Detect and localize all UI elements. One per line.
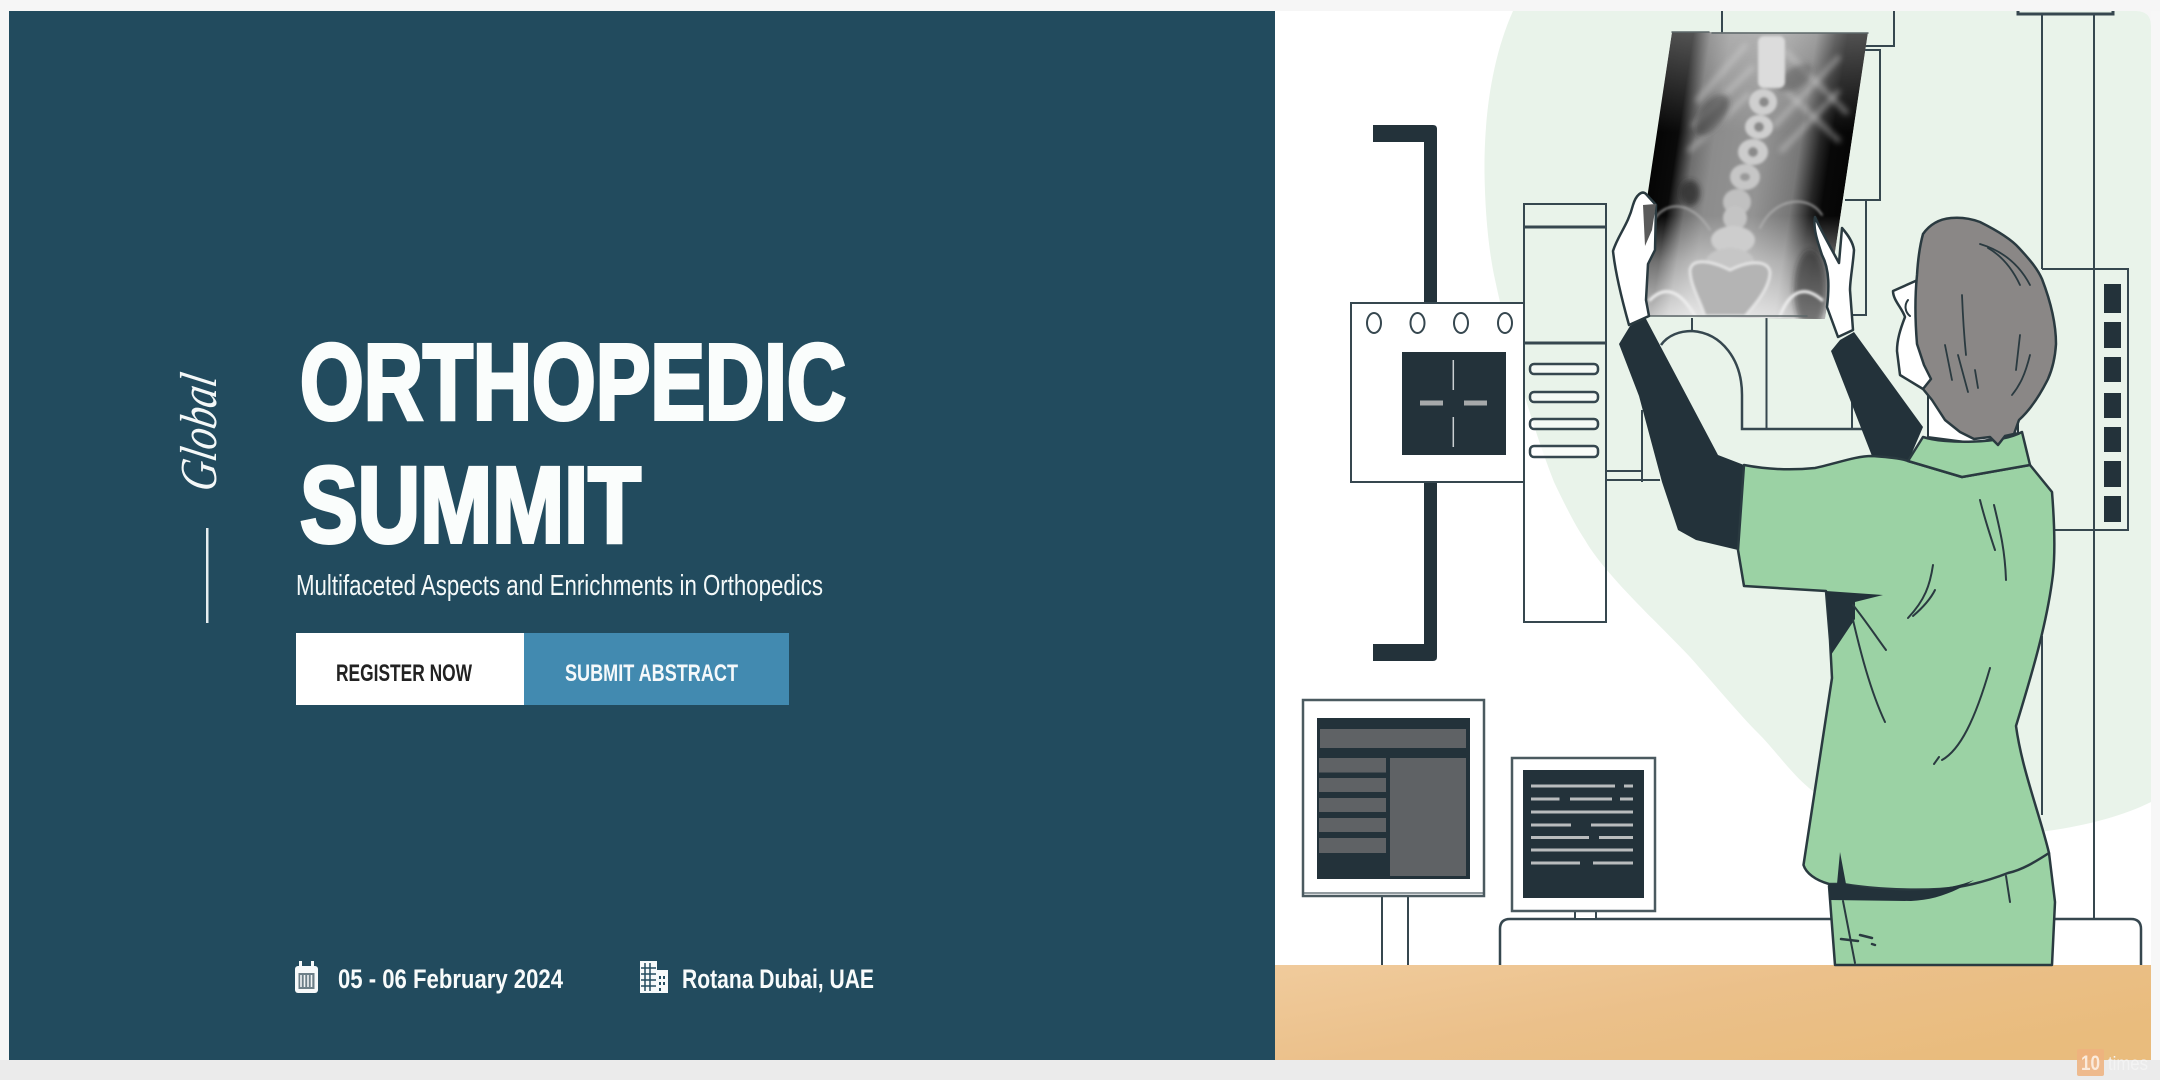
x-ray top and bottom edges — [1650, 32, 1868, 316]
monitor: left — [1303, 700, 1484, 966]
button: register now: REGISTER NOW — [336, 660, 472, 687]
hem shadow — [1829, 852, 1974, 901]
hair — [1916, 218, 2056, 445]
icon: building — [640, 961, 668, 993]
left sleeve — [1619, 317, 1744, 550]
venue: Rotana Dubai, UAE — [682, 964, 874, 994]
button: submit abstract: SUBMIT ABSTRACT — [565, 660, 738, 687]
panel: illustration — [1275, 11, 2151, 1060]
person: doctor in scrubs — [1600, 32, 2056, 965]
subtitle: Multifaceted Aspects and Enrichments in Orthopedics — [296, 570, 823, 602]
scrub fold lines — [1841, 500, 2010, 963]
armpit shadow — [1826, 591, 1883, 655]
watermark: 10times: 10 — [2081, 1052, 2100, 1075]
equipment: rear cabinets — [1661, 11, 1894, 429]
button: register now — [296, 633, 524, 705]
neck — [1928, 395, 2018, 443]
date: 05 - 06 February 2024 — [338, 964, 563, 994]
equipment: right pillar — [2018, 11, 2128, 919]
equipment: dark bracket — [1373, 125, 1437, 661]
title: ORTHOPEDIC — [300, 321, 846, 442]
equipment: indicator squares — [2104, 284, 2121, 522]
scrub collar — [1908, 432, 2030, 477]
equipment: bench — [1500, 919, 2141, 966]
hair strands — [1945, 244, 2030, 395]
background shape: pale green blob — [1484, 11, 2151, 836]
title: SUMMIT — [300, 444, 641, 565]
face — [1892, 280, 1930, 390]
left hand — [1613, 193, 1656, 325]
right hand — [1814, 217, 1854, 337]
floor — [1275, 965, 2151, 1060]
x-ray pelvis — [1650, 202, 1822, 316]
vertical label: Global: Global — [170, 369, 228, 495]
trousers — [1829, 853, 2055, 965]
right margin — [2151, 11, 2160, 1060]
icon: calendar — [295, 961, 318, 993]
button: submit abstract — [524, 633, 789, 705]
right sleeve — [1831, 332, 1923, 462]
equipment: control box — [1351, 303, 1524, 482]
vertical rule — [206, 528, 208, 623]
x-ray spine — [1706, 36, 1785, 276]
panel: conference details — [9, 11, 1276, 1060]
monitor: right — [1512, 758, 1655, 919]
x-ray film — [1647, 32, 1868, 319]
equipment: tall column — [1524, 204, 1660, 622]
watermark: 10times: times — [2108, 1054, 2148, 1075]
watermark: 10times — [2077, 1049, 2148, 1076]
scrub top — [1738, 456, 2054, 890]
title — [300, 321, 846, 565]
